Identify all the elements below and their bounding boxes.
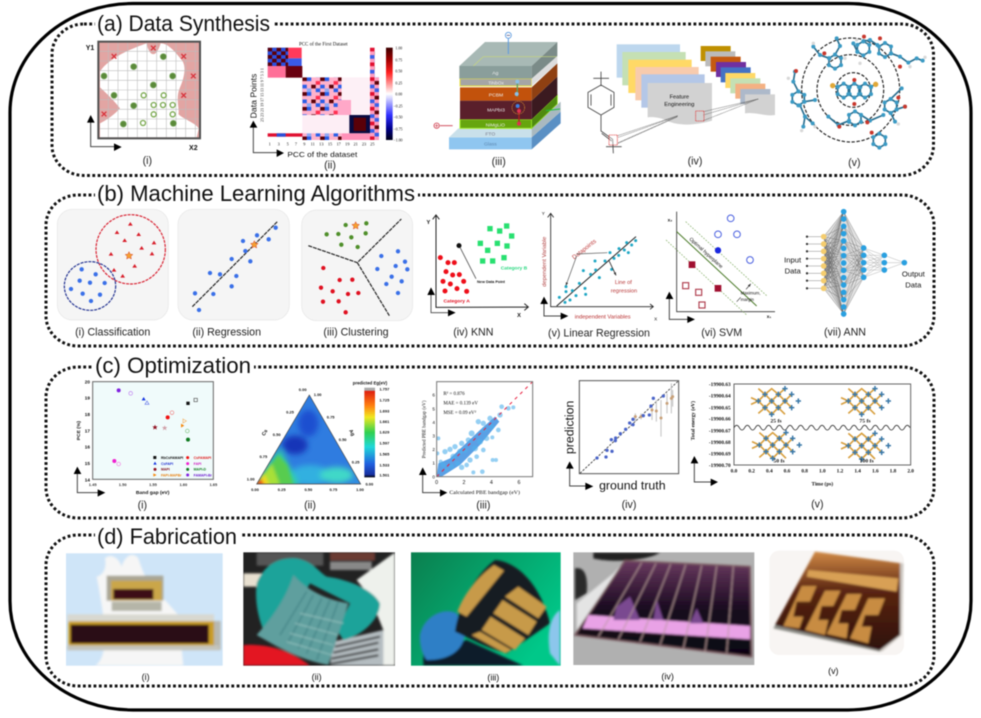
chart: ternary bandgap: 0.75	[327, 415, 335, 420]
chart: KNN: Category B	[501, 265, 528, 271]
chart: total energy vs time: 0.4	[766, 469, 773, 475]
chart: ternary bandgap: 1.725	[379, 397, 390, 402]
chart: ternary bandgap: 0.75	[259, 454, 268, 459]
chart: predicted vs calculated bandgap: Predicted PBE bandgap (eV)	[422, 400, 427, 458]
chart: total energy vs time: -19900.64	[709, 394, 731, 400]
chart: correlation heatmap: 21	[353, 141, 358, 146]
chart: ternary bandgap: predicted Eg(eV)	[353, 380, 388, 385]
diagram: molecule with dashed shells	[787, 35, 927, 169]
chart: linear regression: dependent Variable	[542, 237, 548, 287]
chart: predicted vs calculated bandgap: 3	[432, 434, 435, 439]
chart: ternary bandgap: 1.00	[356, 487, 365, 492]
legend: FAPI	[194, 462, 201, 466]
chart: SVM: Maximum,	[741, 290, 761, 295]
caption (v): (v)	[811, 498, 824, 510]
chart: total energy vs time: 0.2	[748, 469, 755, 475]
caption (v): (v)	[848, 157, 861, 169]
diagram: feature engineering sheets: Engineering	[664, 102, 694, 108]
chart: correlation heatmap: −0.75	[393, 126, 403, 131]
chart: correlation heatmap: Data Points	[248, 73, 258, 118]
diagram: ANN: Data	[905, 280, 922, 289]
caption (iv): (iv)	[622, 499, 636, 511]
chart: correlation heatmap: 19	[345, 141, 349, 146]
diagram: device layer stack	[434, 32, 561, 168]
panel: (c) Optimization	[46, 353, 934, 518]
chart: PCE vs band gap: 18	[85, 412, 90, 417]
chart: linear regression	[540, 211, 658, 340]
chart: ternary bandgap: 0.50	[304, 487, 313, 492]
chart: total energy vs time: 50 fs	[773, 459, 785, 465]
chart: total energy vs time: 1.2	[837, 469, 844, 475]
diagram: device layer stack: Glass	[484, 142, 497, 148]
diagram: ANN	[784, 209, 926, 338]
chart: predicted vs calculated bandgap: 6	[518, 480, 521, 486]
chart: ternary bandgap: 1.565	[379, 451, 390, 456]
caption (iii): (iii)	[476, 499, 490, 511]
chart: correlation heatmap: −0.25	[393, 103, 403, 108]
chart: correlation heatmap: −1.00	[393, 138, 403, 143]
chart: ternary bandgap: 0.50	[339, 437, 347, 442]
diagram: device layer stack: Ag	[492, 70, 499, 76]
chart: design space grid: Y1	[86, 45, 94, 52]
chart: total energy vs time: 0.0	[731, 469, 738, 475]
chart: design space grid: X2	[189, 145, 198, 152]
card: classification	[57, 209, 168, 338]
chart: ternary bandgap	[247, 380, 390, 511]
photo: copper-contact cell	[769, 551, 904, 676]
diagram: device layer stack: MAPbI3	[487, 107, 505, 113]
chart: linear regression: X	[654, 316, 658, 321]
chart: correlation heatmap: −0.50	[393, 115, 403, 120]
panel: (d) Fabrication	[46, 523, 934, 686]
chart: total energy vs time: 75 fs	[859, 419, 871, 425]
chart: SVM: x₁	[767, 314, 771, 319]
legend: MAPI-D	[194, 468, 207, 472]
chart: KNN: Y	[426, 220, 430, 226]
chart: PCE vs band gap: 1.50	[119, 482, 127, 487]
caption (i): (i)	[142, 672, 150, 682]
chart: PCE vs band gap: 20	[85, 379, 90, 384]
chart: PCE vs band gap: 17	[85, 428, 90, 433]
chart: ternary bandgap: Cs	[261, 428, 269, 437]
caption (vii) ANN: (vii) ANN	[824, 326, 866, 338]
diagram: device layer stack: PCBM	[489, 92, 503, 98]
chart: total energy vs time: 0.8	[801, 469, 808, 475]
chart: prediction vs ground truth: ground truth	[599, 479, 666, 493]
chart: correlation heatmap: 3	[278, 141, 280, 146]
chart: total energy vs time: -19900.67	[709, 428, 731, 434]
chart: ternary bandgap: 1.693	[379, 408, 390, 413]
chart: correlation heatmap: 11	[311, 141, 315, 146]
chart: prediction vs ground truth: prediction	[563, 400, 577, 454]
photo: purple perovskite module	[573, 552, 754, 681]
chart: PCE vs band gap: 19	[85, 396, 90, 401]
chart: ternary bandgap: 0.75	[329, 487, 338, 492]
photo: flexible module in teal glove	[243, 552, 395, 682]
chart: KNN: X	[517, 313, 521, 319]
chart: total energy vs time: 1.6	[872, 469, 879, 475]
chart: PCE vs band gap: 16	[85, 445, 90, 450]
chart: linear regression: Line of	[615, 280, 632, 286]
chart: correlation heatmap: 9	[303, 141, 305, 146]
chart: SVM: margin	[741, 297, 754, 302]
diagram: ANN: Output	[902, 270, 926, 279]
chart: total energy vs time: 100 fs	[860, 459, 874, 465]
chart: KNN: Category A	[443, 299, 470, 305]
chart: ternary bandgap: Ag	[347, 428, 356, 437]
heading: Fabrication: (d) Fabrication	[97, 524, 237, 549]
chart: ternary bandgap: 0.00	[299, 387, 307, 392]
chart: linear regression: independent Variables	[575, 315, 631, 321]
chart: total energy vs time: 1.4	[854, 469, 861, 475]
legend: MAPI	[161, 468, 170, 472]
chart: total energy vs time: 0.6	[784, 469, 791, 475]
chart: total energy vs time: -19900.63	[709, 382, 731, 388]
caption (iv): (iv)	[688, 155, 702, 167]
legend: CsFAPI	[161, 462, 173, 466]
caption (ii) Regression: (ii) Regression	[192, 326, 261, 338]
chart: correlation heatmap: 7	[295, 141, 298, 146]
chart: predicted vs calculated bandgap: MSE = 0.09 eV²	[443, 410, 477, 416]
chart: ternary bandgap: 1.00	[314, 392, 322, 397]
chart: total energy vs time: -19900.65	[709, 405, 731, 411]
diagram: ANN: Input	[784, 256, 802, 265]
chart: PCE vs band gap: 1.65	[209, 482, 218, 487]
chart: correlation heatmap: 1	[269, 141, 271, 146]
chart: linear regression: Y	[542, 211, 545, 216]
diagram: device layer stack: NiMgLiO	[486, 123, 505, 129]
chart: total energy vs time: 1.0	[819, 469, 826, 475]
caption (ii): (ii)	[304, 499, 316, 511]
chart: design space grid	[86, 42, 200, 167]
chart: ternary bandgap: 1.629	[379, 430, 390, 435]
legend: FAPI-MAPBr	[161, 473, 182, 477]
chart: ternary bandgap: 1.597	[379, 441, 390, 446]
caption (iv): (iv)	[661, 671, 674, 681]
chart: ternary bandgap: 0.25	[286, 410, 295, 415]
chart: PCE vs band gap: 15	[85, 461, 90, 466]
caption (i): (i)	[143, 155, 152, 167]
chart: PCE vs band gap	[74, 379, 218, 511]
chart: KNN: New Data Point	[477, 280, 506, 284]
caption (ii): (ii)	[312, 672, 322, 682]
chart: linear regression: regression	[611, 288, 637, 294]
chart: total energy vs time: -19900.69	[709, 451, 731, 457]
diagram: ANN: Data	[785, 267, 801, 276]
heading: Machine Learning Algorithms: (b) Machine Learning Algorithms	[97, 181, 415, 206]
chart: ternary bandgap: 0.00	[365, 481, 374, 486]
card: clustering	[302, 210, 413, 338]
photo: flexible cell on green background	[411, 552, 561, 683]
chart: ternary bandgap: 1.661	[379, 419, 390, 424]
caption (iii): (iii)	[492, 156, 506, 168]
diagram: device layer stack: FTO	[485, 131, 495, 137]
chart: correlation heatmap: 13	[319, 141, 323, 146]
card: regression	[178, 209, 289, 338]
chart: PCE vs band gap: 14	[85, 477, 90, 482]
heading: Data Synthesis: (a) Data Synthesis	[97, 11, 270, 36]
chart: KNN	[426, 215, 528, 338]
chart: SVM: Optimal hyperplane	[688, 237, 724, 270]
chart: total energy vs time: Total energy (eV)	[690, 401, 697, 440]
chart: PCE vs band gap: Band gap (eV)	[136, 490, 170, 496]
chart: PCE vs band gap: 1.60	[179, 482, 188, 487]
chart: predicted vs calculated bandgap: 2	[463, 480, 466, 486]
chart: ternary bandgap: 1.501	[379, 473, 390, 478]
chart: predicted vs calculated bandgap: 2	[432, 447, 435, 452]
chart: correlation heatmap: 23	[362, 141, 366, 146]
caption (i): (i)	[138, 499, 147, 511]
chart: SVM: x₂	[668, 218, 672, 223]
chart: correlation heatmap: 0.00	[395, 92, 402, 97]
diagram: feature engineering sheets: Feature	[670, 94, 689, 100]
chart: predicted vs calculated bandgap: 1	[432, 461, 435, 466]
chart: SVM	[666, 212, 775, 339]
caption (iii) Clustering: (iii) Clustering	[323, 326, 389, 338]
chart: PCE vs band gap: PCE (%)	[76, 421, 82, 440]
chart: predicted vs calculated bandgap: Calculated PBE bandgap (eV)	[449, 491, 520, 496]
chart: PCE vs band gap: 1.55	[149, 482, 158, 487]
legend: CsFAMAPI	[194, 456, 211, 460]
chart: ternary bandgap: 0.25	[278, 487, 286, 492]
caption (iii): (iii)	[487, 673, 499, 683]
heading: Optimization: (c) Optimization	[95, 353, 251, 378]
chart: correlation heatmap: 0.75	[395, 57, 402, 62]
chart: ternary bandgap: 0.50	[273, 432, 281, 437]
caption (v) Linear Regression: (v) Linear Regression	[548, 328, 650, 340]
chart: predicted vs calculated bandgap: MAE = 0.139 eV	[443, 401, 478, 406]
chart: correlation heatmap: PCC of the dataset	[287, 150, 358, 159]
caption (ii): (ii)	[324, 159, 336, 171]
chart: total energy vs time: Time (ps)	[811, 480, 833, 487]
chart: total energy vs time: 2.0	[907, 469, 914, 475]
legend: RbCsFAMAPI	[161, 456, 183, 460]
chart: total energy vs time: -19900.66	[709, 417, 731, 423]
chart: correlation heatmap: 5	[287, 141, 289, 146]
legend: FAMAPI-Br	[194, 473, 213, 477]
chart: correlation heatmap: 1.00	[395, 46, 402, 51]
chart: predicted vs calculated bandgap: 0	[432, 474, 435, 479]
caption (i) Classification: (i) Classification	[75, 326, 150, 338]
chart: total energy vs time: -19900.68	[709, 440, 731, 446]
photo: module on glove	[66, 553, 223, 682]
chart: correlation heatmap: 0.50	[395, 69, 402, 74]
chart: total energy vs time: 25 fs	[770, 419, 782, 425]
chart: ternary bandgap: 0.00	[251, 487, 260, 492]
chart: total energy vs time	[690, 382, 914, 510]
chart: total energy vs time: 1.8	[890, 469, 897, 475]
chart: linear regression: Datapoints	[572, 239, 598, 261]
caption (v): (v)	[828, 666, 839, 676]
panel: (b) Machine Learning Algorithms	[46, 181, 934, 346]
chart: predicted vs calculated bandgap: 4	[490, 480, 493, 486]
chart: ternary bandgap: 0.25	[352, 459, 360, 464]
chart: correlation heatmap: 15	[328, 141, 332, 146]
chart: correlation heatmap: 25 23 21 19 17 15 13 11 9 7 5 3 1	[260, 68, 265, 122]
chart: correlation heatmap: PCC of the First Dataset	[299, 43, 348, 48]
diagram: feature engineering sheets	[588, 44, 775, 167]
chart: PCE vs band gap: 1.45	[89, 482, 97, 487]
chart: correlation heatmap	[248, 43, 403, 171]
chart: total energy vs time: -19900.70	[709, 463, 731, 469]
panel: (a) Data Synthesis	[52, 11, 934, 176]
legend	[153, 456, 213, 477]
chart: correlation heatmap: 17	[336, 141, 342, 146]
chart: predicted vs calculated bandgap	[419, 382, 533, 511]
chart: predicted vs calculated bandgap: 0	[435, 480, 438, 486]
chart: predicted vs calculated bandgap: 5	[432, 406, 435, 411]
chart: prediction vs ground truth	[563, 381, 679, 511]
caption (iv) KNN: (iv) KNN	[453, 326, 493, 338]
caption (vi) SVM: (vi) SVM	[701, 327, 742, 339]
chart: ternary bandgap: 1.533	[379, 462, 390, 467]
chart: predicted vs calculated bandgap: 6	[432, 393, 435, 398]
chart: predicted vs calculated bandgap: 4	[432, 420, 435, 425]
chart: correlation heatmap: 0.25	[395, 80, 402, 85]
chart: ternary bandgap: 1.00	[247, 476, 255, 481]
chart: correlation heatmap: 25	[370, 141, 374, 146]
diagram: device layer stack: TiNbOx	[488, 81, 504, 86]
chart: predicted vs calculated bandgap: R² = 0.876	[443, 391, 465, 397]
chart: ternary bandgap: 1.757	[379, 387, 390, 392]
